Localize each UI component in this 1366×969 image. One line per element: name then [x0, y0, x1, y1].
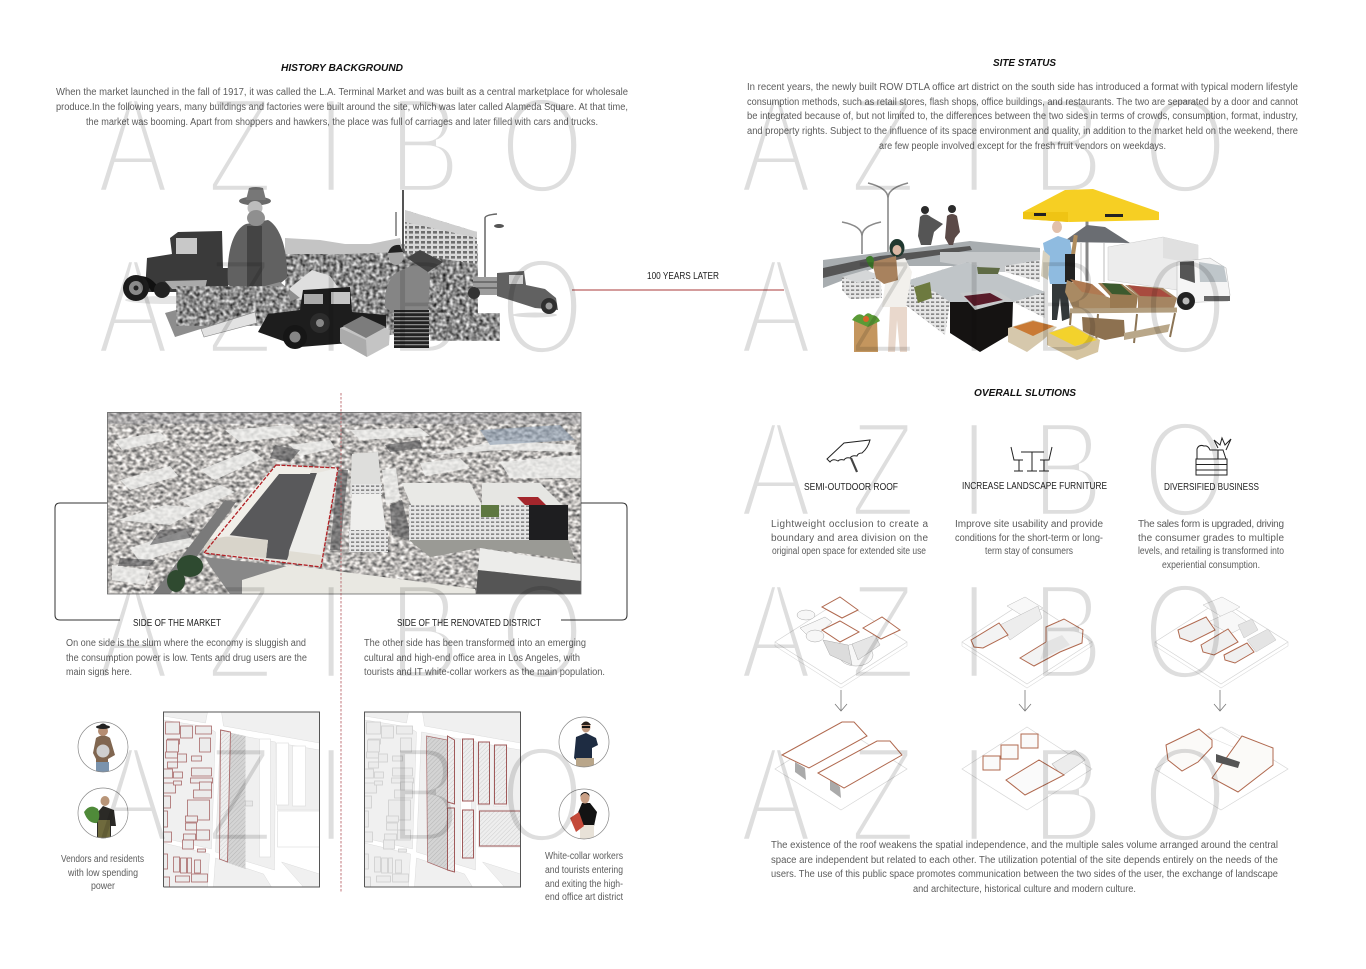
text block: site status paragraph: consumption methods, such as retail stores, flash shops, office buildings, and restaurants. The two are separated by a door and cannot — [747, 97, 1298, 108]
watermark letters — [97, 69, 1227, 872]
grey tent — [1063, 225, 1130, 282]
text block: conclusion paragraph: space are independent but related to each other. The utilization potential of the site depends entirely on the needs of the — [771, 855, 1278, 866]
collage: historic market in black and white — [123, 187, 558, 357]
text block: conclusion paragraph: and architecture, historical culture and modern culture. — [913, 884, 1136, 895]
back market buildings — [823, 241, 1040, 299]
diagram: furniture pods — [962, 727, 1092, 810]
central vintage truck — [258, 287, 386, 349]
person: vendor with greens — [78, 788, 128, 838]
text block: roof description: boundary and area division on the — [771, 533, 928, 544]
text block: conclusion paragraph: users. The use of this public space promotes communication between the two sides of the user, the exchange of landscape — [771, 869, 1278, 880]
map: renovated side — [364, 712, 524, 887]
grocery paper bag — [852, 313, 880, 352]
text block: history paragraph: produce.In the following years, many buildings and factories were built around the site, which was later called Alameda Square. At that time, — [56, 102, 628, 113]
label: increase landscape furniture: INCREASE LANDSCAPE FURNITURE — [962, 481, 1107, 492]
dark tower — [950, 302, 1013, 352]
text block: business description — [1138, 519, 1284, 571]
wooden crate of produce — [340, 316, 390, 357]
label: diversified business: DIVERSIFIED BUSINESS — [1164, 482, 1259, 493]
text block: site status paragraph: and property rights. Subject to the influence of its space environment and quality, in addition to the market held on the weekend, there — [747, 126, 1298, 137]
text block: white-collar caption: end office art district — [545, 892, 623, 903]
market street photo — [285, 244, 478, 335]
foreground white roofs — [242, 548, 581, 594]
panel: increase landscape furniture — [955, 447, 1107, 557]
modern street lamps — [842, 183, 908, 254]
watermark letters: AZIBO — [740, 393, 1227, 547]
text block: furniture description — [955, 519, 1103, 557]
panel: side of the renovated district — [364, 618, 623, 903]
watermark letters: AZIBO — [740, 555, 1227, 709]
text block: vendors caption: with low spending — [67, 868, 138, 879]
text block: business description: levels, and retailing is transformed into — [1138, 546, 1284, 557]
bracket: left and right sides — [55, 503, 627, 620]
watermark letters: AZIBO — [97, 718, 584, 872]
panel: semi-outdoor roof — [771, 440, 928, 557]
yellow market umbrella — [1023, 189, 1159, 281]
connector: 100 years later: 100 YEARS LATER — [647, 271, 719, 282]
man with apron — [385, 245, 443, 348]
text block: site status paragraph: are few people involved except for the fresh fruit vendors on weekdays. — [879, 141, 1166, 152]
person: vendor with flowers — [78, 722, 128, 774]
collage: present day market — [823, 183, 1230, 360]
text block: roof description: original open space for extended site use — [772, 546, 926, 557]
text block: white-collar caption — [545, 851, 623, 903]
diagram: roof option existing state — [775, 597, 907, 688]
text block: site status paragraph: be integrated because of, but not limited to, the differences between the two sides in terms of crowds, consumption, format, industry, — [747, 111, 1298, 122]
text block: conclusion paragraph — [771, 840, 1278, 895]
watermark letters: AZIBO — [97, 69, 584, 223]
text block: renovated side description: tourists and IT white-collar workers as the main population. — [364, 667, 605, 678]
diagram: pitched roofs — [775, 722, 907, 810]
watermark letters: AZIBO — [97, 230, 584, 384]
diagram: furniture option existing state — [962, 597, 1092, 688]
panel: side of the market — [61, 618, 320, 892]
text block: renovated side description: cultural and high-end office area in Los Angeles, with — [364, 653, 580, 664]
text block: market side description: the consumption power is low. Tents and drug users are the — [66, 653, 307, 664]
woman in blue top — [1041, 221, 1078, 321]
two women walking — [918, 205, 960, 245]
text block: site status paragraph: In recent years, the newly built ROW DTLA office art district on the south side has introduced a format with typical modern lifestyle — [747, 82, 1298, 93]
text block: renovated side description: The other side has been transformed into an emerging — [364, 638, 586, 649]
panel: aerial photograph of the site — [107, 412, 581, 594]
historic building — [405, 210, 477, 264]
arrow: down column two — [1019, 690, 1031, 711]
delivery truck — [1108, 237, 1230, 310]
icon: table and chairs — [1011, 447, 1052, 471]
map: market side — [164, 712, 320, 887]
person: man in navy shirt — [559, 717, 609, 770]
person: woman with red bag — [559, 789, 609, 839]
text block: furniture description: term stay of consumers — [985, 546, 1073, 557]
aerial city texture — [107, 412, 581, 594]
text block: history paragraph: When the market launched in the fall of 1917, it was called the L.A. Terminal Market and was built as a central marketplace for wholesale — [56, 87, 628, 98]
heading: history background: HISTORY BACKGROUND — [281, 62, 403, 74]
text block: white-collar caption: and exiting the high- — [545, 879, 623, 890]
central white buildings — [349, 452, 388, 552]
diagram: large enclosed volumes — [1155, 727, 1288, 810]
bearded man with hat — [228, 187, 287, 290]
dashed dividing line — [340, 393, 342, 893]
diagram: business option existing state — [1155, 597, 1288, 688]
text block: business description: the consumer grades to multiple — [1138, 533, 1284, 544]
arrow: down column three — [1214, 690, 1226, 711]
text block: vendors caption: power — [91, 881, 116, 892]
arrow: down column one — [835, 690, 847, 711]
text block: vendors caption — [61, 854, 144, 892]
panel: diversified business — [1138, 438, 1284, 571]
icon: umbrella — [827, 440, 870, 472]
surrounding rooftops — [112, 425, 581, 585]
icon: produce crate — [1196, 438, 1231, 475]
renovated office complex — [402, 483, 575, 560]
text block: market side description — [66, 638, 307, 678]
text block: furniture description: conditions for the short-term or long- — [955, 533, 1103, 544]
crates of oranges and lemons — [1008, 320, 1100, 360]
heading: site status: SITE STATUS — [993, 57, 1056, 69]
produce stall — [1065, 279, 1177, 343]
text block: market side description: On one side is the slum where the economy is sluggish and — [66, 638, 306, 649]
text block: market side description: main signs here. — [66, 667, 132, 678]
watermark letters: AZIBO — [740, 230, 1227, 384]
text block: business description: experiential consumption. — [1162, 560, 1260, 571]
label: side of the market: SIDE OF THE MARKET — [133, 618, 221, 629]
label: semi-outdoor roof: SEMI-OUTDOOR ROOF — [804, 482, 898, 493]
text block: furniture description: Improve site usability and provide — [955, 519, 1103, 530]
text block: history paragraph: the market was booming. Apart from shoppers and hawkers, the place was full of carriages and later filled with cars and trucks. — [86, 117, 598, 128]
street lamps — [396, 190, 504, 277]
right vintage truck — [468, 271, 558, 318]
street and trees — [153, 500, 475, 594]
heading: overall solutions: OVERALL SLUTIONS — [974, 387, 1076, 399]
market model — [165, 282, 300, 337]
text block: white-collar caption: White-collar workers — [545, 851, 623, 862]
panel: site status — [747, 57, 1298, 152]
panel: history background — [56, 62, 628, 128]
text block: site status paragraph — [747, 82, 1298, 152]
woman with groceries — [866, 239, 912, 352]
watermark letters: AZIBO — [740, 69, 1227, 223]
market roofs and parking lot — [204, 465, 338, 567]
text block: roof description — [771, 519, 928, 557]
text block: business description: The sales form is upgraded, driving — [1138, 519, 1284, 530]
watermark letters: AZIBO — [740, 718, 1227, 872]
text block: vendors caption: Vendors and residents — [61, 854, 144, 865]
text block: history paragraph — [56, 87, 628, 128]
text block: renovated side description — [364, 638, 605, 678]
watermark letters: AZIBO — [97, 555, 584, 709]
modern office block — [903, 262, 1045, 352]
text block: white-collar caption: and tourists entering — [545, 865, 623, 876]
left vintage truck — [123, 231, 228, 304]
text block: roof description: Lightweight occlusion to create a — [771, 519, 928, 530]
label: side of the renovated district: SIDE OF THE RENOVATED DISTRICT — [397, 618, 541, 629]
text block: conclusion paragraph: The existence of the roof weakens the spatial independence, and the multiple sales volume arranged around the central — [771, 840, 1278, 851]
